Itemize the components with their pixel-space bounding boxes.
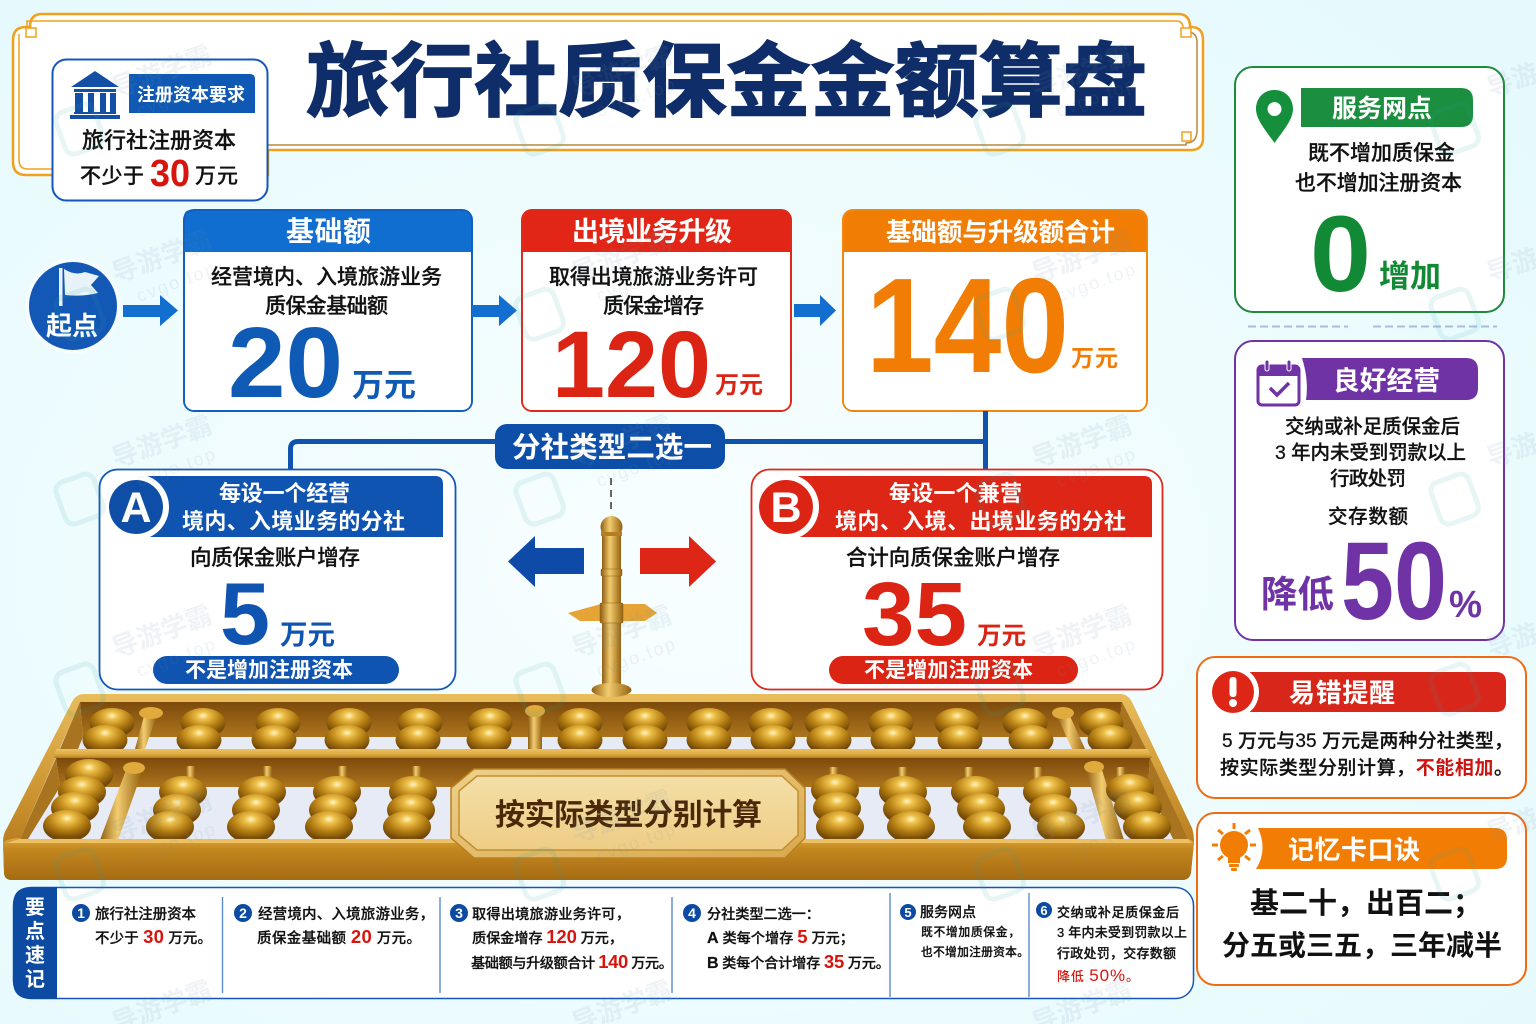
- text: 导游学霸: [568, 225, 676, 288]
- header: [1302, 358, 1478, 400]
- point 4: 4: [688, 905, 696, 921]
- strip header: 要: [25, 896, 45, 919]
- point 5: 既不增加质保金，: [921, 925, 1020, 939]
- middle beam: [54, 749, 1152, 758]
- fifty percent: 降低: [1261, 574, 1334, 615]
- body: 交纳或补足质保金后: [1285, 416, 1460, 438]
- abacus plate: 按实际类型分别计算: [495, 799, 762, 832]
- body: 行政处罚: [1330, 468, 1406, 490]
- abacus plate: [451, 769, 805, 858]
- panel: total: 万元: [1071, 345, 1118, 371]
- A header: 境内、入境业务的分社: [182, 509, 405, 534]
- text: cvgo.top: [134, 818, 219, 866]
- header: [1301, 88, 1473, 127]
- point 2: 质保金基础额 20 万元。: [257, 926, 421, 947]
- panel: outbound upgrade: 120: [552, 312, 711, 418]
- point 4: 分社类型二选一：: [707, 907, 820, 923]
- icon: flag: [59, 268, 99, 306]
- body: 按实际类型分别计算，不能相加。: [1220, 757, 1513, 779]
- verse: 基二十，出百二；: [1250, 887, 1482, 920]
- point 5: 服务网点: [920, 904, 976, 920]
- panel: good operation: [1235, 341, 1504, 643]
- text: cvgo.top: [1054, 73, 1139, 121]
- panel: mnemonic: [1197, 813, 1526, 985]
- point 2: 2: [239, 905, 247, 921]
- point 6: 3 年内未受到罚款以上: [1057, 925, 1187, 940]
- A header: A: [120, 484, 152, 532]
- panel: outbound upgrade: 出境业务升级: [572, 217, 732, 247]
- B pill: 不是增加注册资本: [864, 659, 1033, 682]
- strip header: [13, 887, 57, 999]
- body: 既不增加质保金: [1308, 142, 1455, 165]
- header: 良好经营: [1333, 366, 1440, 396]
- B amount: 合计向质保金账户增存: [846, 546, 1060, 570]
- point 5: 也不增加注册资本。: [921, 945, 1029, 959]
- B amount: 万元: [977, 623, 1026, 650]
- text: 导游学霸: [1028, 410, 1136, 473]
- strip header: 点: [25, 920, 45, 943]
- B amount: 35: [862, 565, 967, 665]
- point 1: 旅行社注册资本: [95, 905, 196, 923]
- B header: [753, 474, 1152, 540]
- B header: 每设一个兼营: [889, 481, 1022, 506]
- text: 导游学霸: [1028, 600, 1136, 663]
- text: cvgo.top: [134, 258, 219, 306]
- A pill: [153, 656, 399, 684]
- text: 导游学霸: [568, 40, 676, 103]
- body: [1220, 730, 1513, 779]
- icon: warning: [1207, 666, 1259, 718]
- icon: bank: [70, 71, 120, 119]
- panel: option B: [752, 470, 1162, 690]
- panel: outbound upgrade: [522, 210, 791, 418]
- text: 导游学霸: [568, 785, 676, 848]
- B pill: [829, 656, 1078, 684]
- text: 导游学霸: [1028, 225, 1136, 288]
- text: 导游学霸: [108, 785, 216, 848]
- connector lines: [290, 411, 986, 469]
- arrow: upgrade to total: [794, 295, 836, 326]
- point 5: [900, 904, 1029, 959]
- point 5: 5: [904, 905, 912, 920]
- panel: base amount: 万元: [352, 367, 416, 403]
- arrow: base to upgrade: [472, 295, 517, 326]
- text: 导游学霸: [568, 600, 676, 663]
- text: 导游学霸: [108, 225, 216, 288]
- fifty percent: [1261, 520, 1482, 643]
- panel: common mistake: [1197, 657, 1526, 798]
- verse: [1222, 887, 1502, 961]
- fifty percent: %: [1449, 584, 1482, 626]
- A header: [103, 474, 443, 540]
- choose-one heading: 分社类型二选一: [512, 432, 712, 464]
- text: 导游学霸: [108, 600, 216, 663]
- arrow: red right: [640, 536, 716, 587]
- point 1: 1: [77, 905, 85, 921]
- body: 交存数额: [1328, 506, 1408, 528]
- panel: base amount: [184, 210, 472, 419]
- text: cvgo.top: [1054, 818, 1139, 866]
- text: cvgo.top: [1054, 443, 1139, 491]
- point 6: [1036, 902, 1187, 985]
- start label: 起点: [46, 311, 98, 341]
- A amount: 向质保金账户增存: [190, 546, 360, 570]
- signpost: [568, 516, 657, 697]
- point 3: 基础额与升级额合计 140 万元。: [471, 951, 673, 972]
- dashed pointer: [610, 478, 612, 514]
- header: 注册资本要求: [137, 85, 245, 105]
- verse: 分五或三五，三年减半: [1222, 929, 1502, 961]
- abacus frame: [3, 694, 1194, 880]
- point 2: [234, 904, 434, 947]
- text: 导游学霸: [568, 410, 676, 473]
- text: cvgo.top: [594, 633, 679, 681]
- header: 记忆卡口诀: [1288, 835, 1420, 865]
- panel: total: 140: [866, 250, 1069, 401]
- text: cvgo.top: [594, 818, 679, 866]
- B amount: [846, 546, 1060, 665]
- body: 也不增加注册资本: [1295, 172, 1462, 195]
- A pill: 不是增加注册资本: [185, 659, 353, 682]
- panel: outbound upgrade: 取得出境旅游业务许可: [549, 266, 758, 289]
- abacus: [3, 694, 1194, 880]
- point 3: [450, 904, 673, 972]
- panel: base amount: 基础额: [286, 216, 371, 247]
- capital text: 30: [150, 153, 190, 195]
- text: 导游学霸: [108, 410, 216, 473]
- text: 导游学霸: [1028, 40, 1136, 103]
- icon: bulb: [1212, 823, 1256, 871]
- panel: total: 基础额与升级额合计: [886, 219, 1115, 247]
- capital text: 万元: [195, 165, 238, 188]
- icon: calendar: [1258, 360, 1299, 405]
- B header: 境内、入境、出境业务的分社: [835, 509, 1126, 534]
- panel: option A: [100, 470, 456, 690]
- point 6: 交纳或补足质保金后: [1057, 905, 1179, 920]
- arrow: blue left: [508, 536, 584, 587]
- panel: base amount: 经营境内、入境旅游业务: [211, 266, 442, 289]
- header: [1250, 672, 1506, 712]
- panel: base amount: 20: [228, 307, 343, 419]
- point 3: 3: [455, 905, 463, 921]
- panel: key points strip: [13, 887, 1194, 999]
- capital text: 旅行社注册资本: [82, 128, 236, 153]
- arrow: start to base: [123, 295, 178, 326]
- text: cvgo.top: [134, 633, 219, 681]
- fifty percent: 50: [1341, 520, 1447, 643]
- body: 3 年内未受到罚款以上: [1275, 442, 1466, 464]
- A amount: [190, 546, 360, 663]
- point 4: A 类每个增存 5 万元；: [707, 926, 854, 947]
- text: cvgo.top: [594, 73, 679, 121]
- point 4: B 类每个合计增存 35 万元。: [707, 951, 890, 972]
- text: 导游学霸: [1028, 785, 1136, 848]
- header: [1256, 828, 1507, 869]
- panel: total: [843, 210, 1147, 411]
- icon: pin: [1256, 90, 1293, 143]
- panel: outbound upgrade: 质保金增存: [603, 295, 704, 318]
- start node: [25, 258, 121, 354]
- front rail highlight: [6, 839, 1192, 843]
- header: 易错提醒: [1289, 678, 1395, 708]
- zero: 增加: [1379, 259, 1441, 294]
- A header: 每设一个经营: [219, 481, 350, 506]
- point 2: 经营境内、入境旅游业务，: [258, 905, 434, 923]
- B header: B: [770, 484, 802, 532]
- abacus interior: [20, 702, 1188, 839]
- strip header: 速: [25, 944, 45, 967]
- point 1: 不少于 30 万元。: [95, 926, 212, 947]
- A amount: 万元: [280, 619, 335, 650]
- title: 旅行社质保金金额算盘: [306, 38, 1147, 128]
- header: 服务网点: [1332, 95, 1432, 123]
- body: [1295, 142, 1462, 195]
- upper beads: [82, 708, 1132, 755]
- capital text: 不少于: [80, 165, 144, 188]
- body: 5 万元与35 万元是两种分社类型，: [1222, 730, 1513, 752]
- choose-one heading: [495, 424, 725, 469]
- point 1: [72, 904, 212, 947]
- text: cvgo.top: [594, 258, 679, 306]
- panel: registered capital: [52, 60, 268, 200]
- text: 导游学霸: [108, 40, 216, 103]
- capital text: [80, 128, 238, 195]
- strip header: 记: [25, 968, 45, 991]
- point 4: [683, 904, 890, 972]
- zero: [1310, 193, 1441, 314]
- panel: base amount: 质保金基础额: [265, 295, 388, 318]
- point 3: 质保金增存 120 万元，: [472, 926, 623, 947]
- A amount: 5: [220, 564, 270, 663]
- point 6: 降低 50%。: [1057, 966, 1139, 985]
- lower beads: [43, 759, 1171, 843]
- lower rods and posts: [100, 761, 1125, 840]
- text: cvgo.top: [1054, 258, 1139, 306]
- text: cvgo.top: [1054, 633, 1139, 681]
- title banner frame: [13, 14, 1203, 175]
- abacus posts: [135, 705, 1085, 750]
- panel: service outlet: [1235, 67, 1504, 314]
- text: cvgo.top: [594, 443, 679, 491]
- panel: outbound upgrade: 万元: [715, 372, 763, 399]
- point 6: 6: [1040, 903, 1048, 918]
- text: cvgo.top: [134, 73, 219, 121]
- text: cvgo.top: [134, 443, 219, 491]
- zero: 0: [1310, 193, 1371, 314]
- point 6: 行政处罚，交存数额: [1057, 946, 1176, 961]
- point 3: 取得出境旅游业务许可，: [472, 906, 630, 923]
- body: [1275, 416, 1466, 528]
- header: [129, 74, 255, 113]
